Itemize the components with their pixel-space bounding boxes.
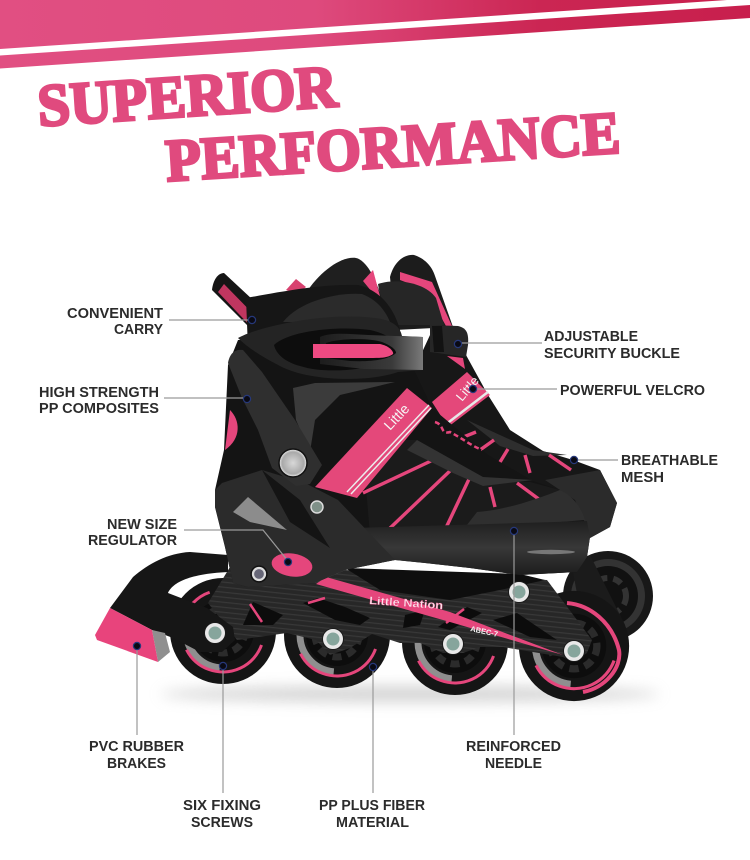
title: SUPERIOR (35, 53, 340, 139)
callout: convenient carry: CARRY (114, 322, 163, 338)
callout: screws (183, 662, 261, 831)
callout: brakes (89, 642, 185, 772)
boot upper (215, 340, 590, 587)
title (35, 53, 622, 194)
callout: convenient carry: CONVENIENT (67, 306, 163, 322)
front velcro strap (315, 388, 432, 498)
size regulator (270, 551, 314, 579)
callout: buckle (454, 329, 680, 362)
callout: fiber (319, 663, 426, 831)
callout: size regulator: REGULATOR (88, 533, 178, 549)
brake arm (110, 552, 235, 652)
rear skate (378, 255, 653, 641)
frame window cutouts (243, 598, 557, 640)
lower shell mesh (362, 440, 583, 535)
pink brake block (95, 608, 170, 662)
axles (204, 582, 584, 662)
front cuff and latch (238, 316, 423, 379)
rear velcro strap (432, 372, 490, 427)
pink side panel (225, 410, 238, 450)
collar pad (246, 285, 405, 400)
rear frame strut (573, 555, 625, 640)
rear buckle (430, 325, 468, 369)
rear boot body (400, 335, 617, 540)
front velcro strap: Little (380, 400, 413, 433)
laces (435, 422, 482, 450)
title: PERFORMANCE (164, 100, 622, 194)
lace guard (407, 440, 533, 486)
callout: needle (466, 527, 561, 772)
callout: high strength: HIGH STRENGTH (39, 385, 159, 401)
carry strap (212, 273, 268, 336)
front boot (215, 285, 590, 587)
callout: size regulator: NEW SIZE (107, 517, 177, 533)
heel screw (251, 566, 267, 582)
callout: fiber: MATERIAL (336, 815, 409, 831)
ground shadow (160, 686, 660, 702)
callout: needle: REINFORCED (466, 739, 561, 755)
wheels (170, 578, 629, 701)
heel shell (215, 470, 395, 587)
silver rivet (279, 449, 307, 477)
front tongue (286, 258, 382, 318)
rear velcro strap: Little (453, 373, 482, 404)
callout: screws: SIX FIXING (183, 798, 261, 814)
callout: high strength (39, 385, 251, 417)
pink window accents (250, 598, 464, 623)
callout: velcro: POWERFUL VELCRO (560, 383, 705, 399)
callout: buckle: ADJUSTABLE (544, 329, 638, 345)
sole band (355, 521, 590, 575)
toe cap (463, 490, 585, 530)
callout: mesh: BREATHABLE (621, 453, 718, 469)
front wheel upper pink arc (567, 603, 619, 692)
rear toe cap (545, 470, 617, 538)
frame bearing label: ABEC-7 (470, 624, 499, 639)
mesh stripes (363, 460, 540, 532)
small screw (311, 501, 323, 513)
callout: brakes: PVC RUBBER (89, 739, 185, 755)
callout: fiber: PP PLUS FIBER (319, 798, 426, 814)
header banner (0, 0, 750, 68)
callout: brakes: BRAKES (107, 756, 166, 772)
callout: screws: SCREWS (191, 815, 253, 831)
vent panel (293, 382, 395, 452)
rear tongue (390, 255, 453, 330)
callout: mesh (570, 453, 718, 486)
callout: needle: NEEDLE (485, 756, 542, 772)
rear mesh stripes (461, 432, 571, 473)
callout: size regulator (88, 517, 292, 566)
rear lace guard (467, 420, 567, 456)
rear wheel (563, 551, 653, 641)
callout: high strength: PP COMPOSITES (39, 401, 159, 417)
callout: buckle: SECURITY BUCKLE (544, 346, 680, 362)
frame (208, 567, 592, 662)
frame pink stripe (316, 577, 563, 655)
callout: velcro (469, 383, 705, 399)
carbon side bar (228, 350, 322, 486)
frame brand: Little Nation (369, 595, 444, 612)
callout: mesh: MESH (621, 470, 664, 486)
pink latch pad (313, 344, 393, 358)
callout: convenient carry (67, 306, 256, 338)
